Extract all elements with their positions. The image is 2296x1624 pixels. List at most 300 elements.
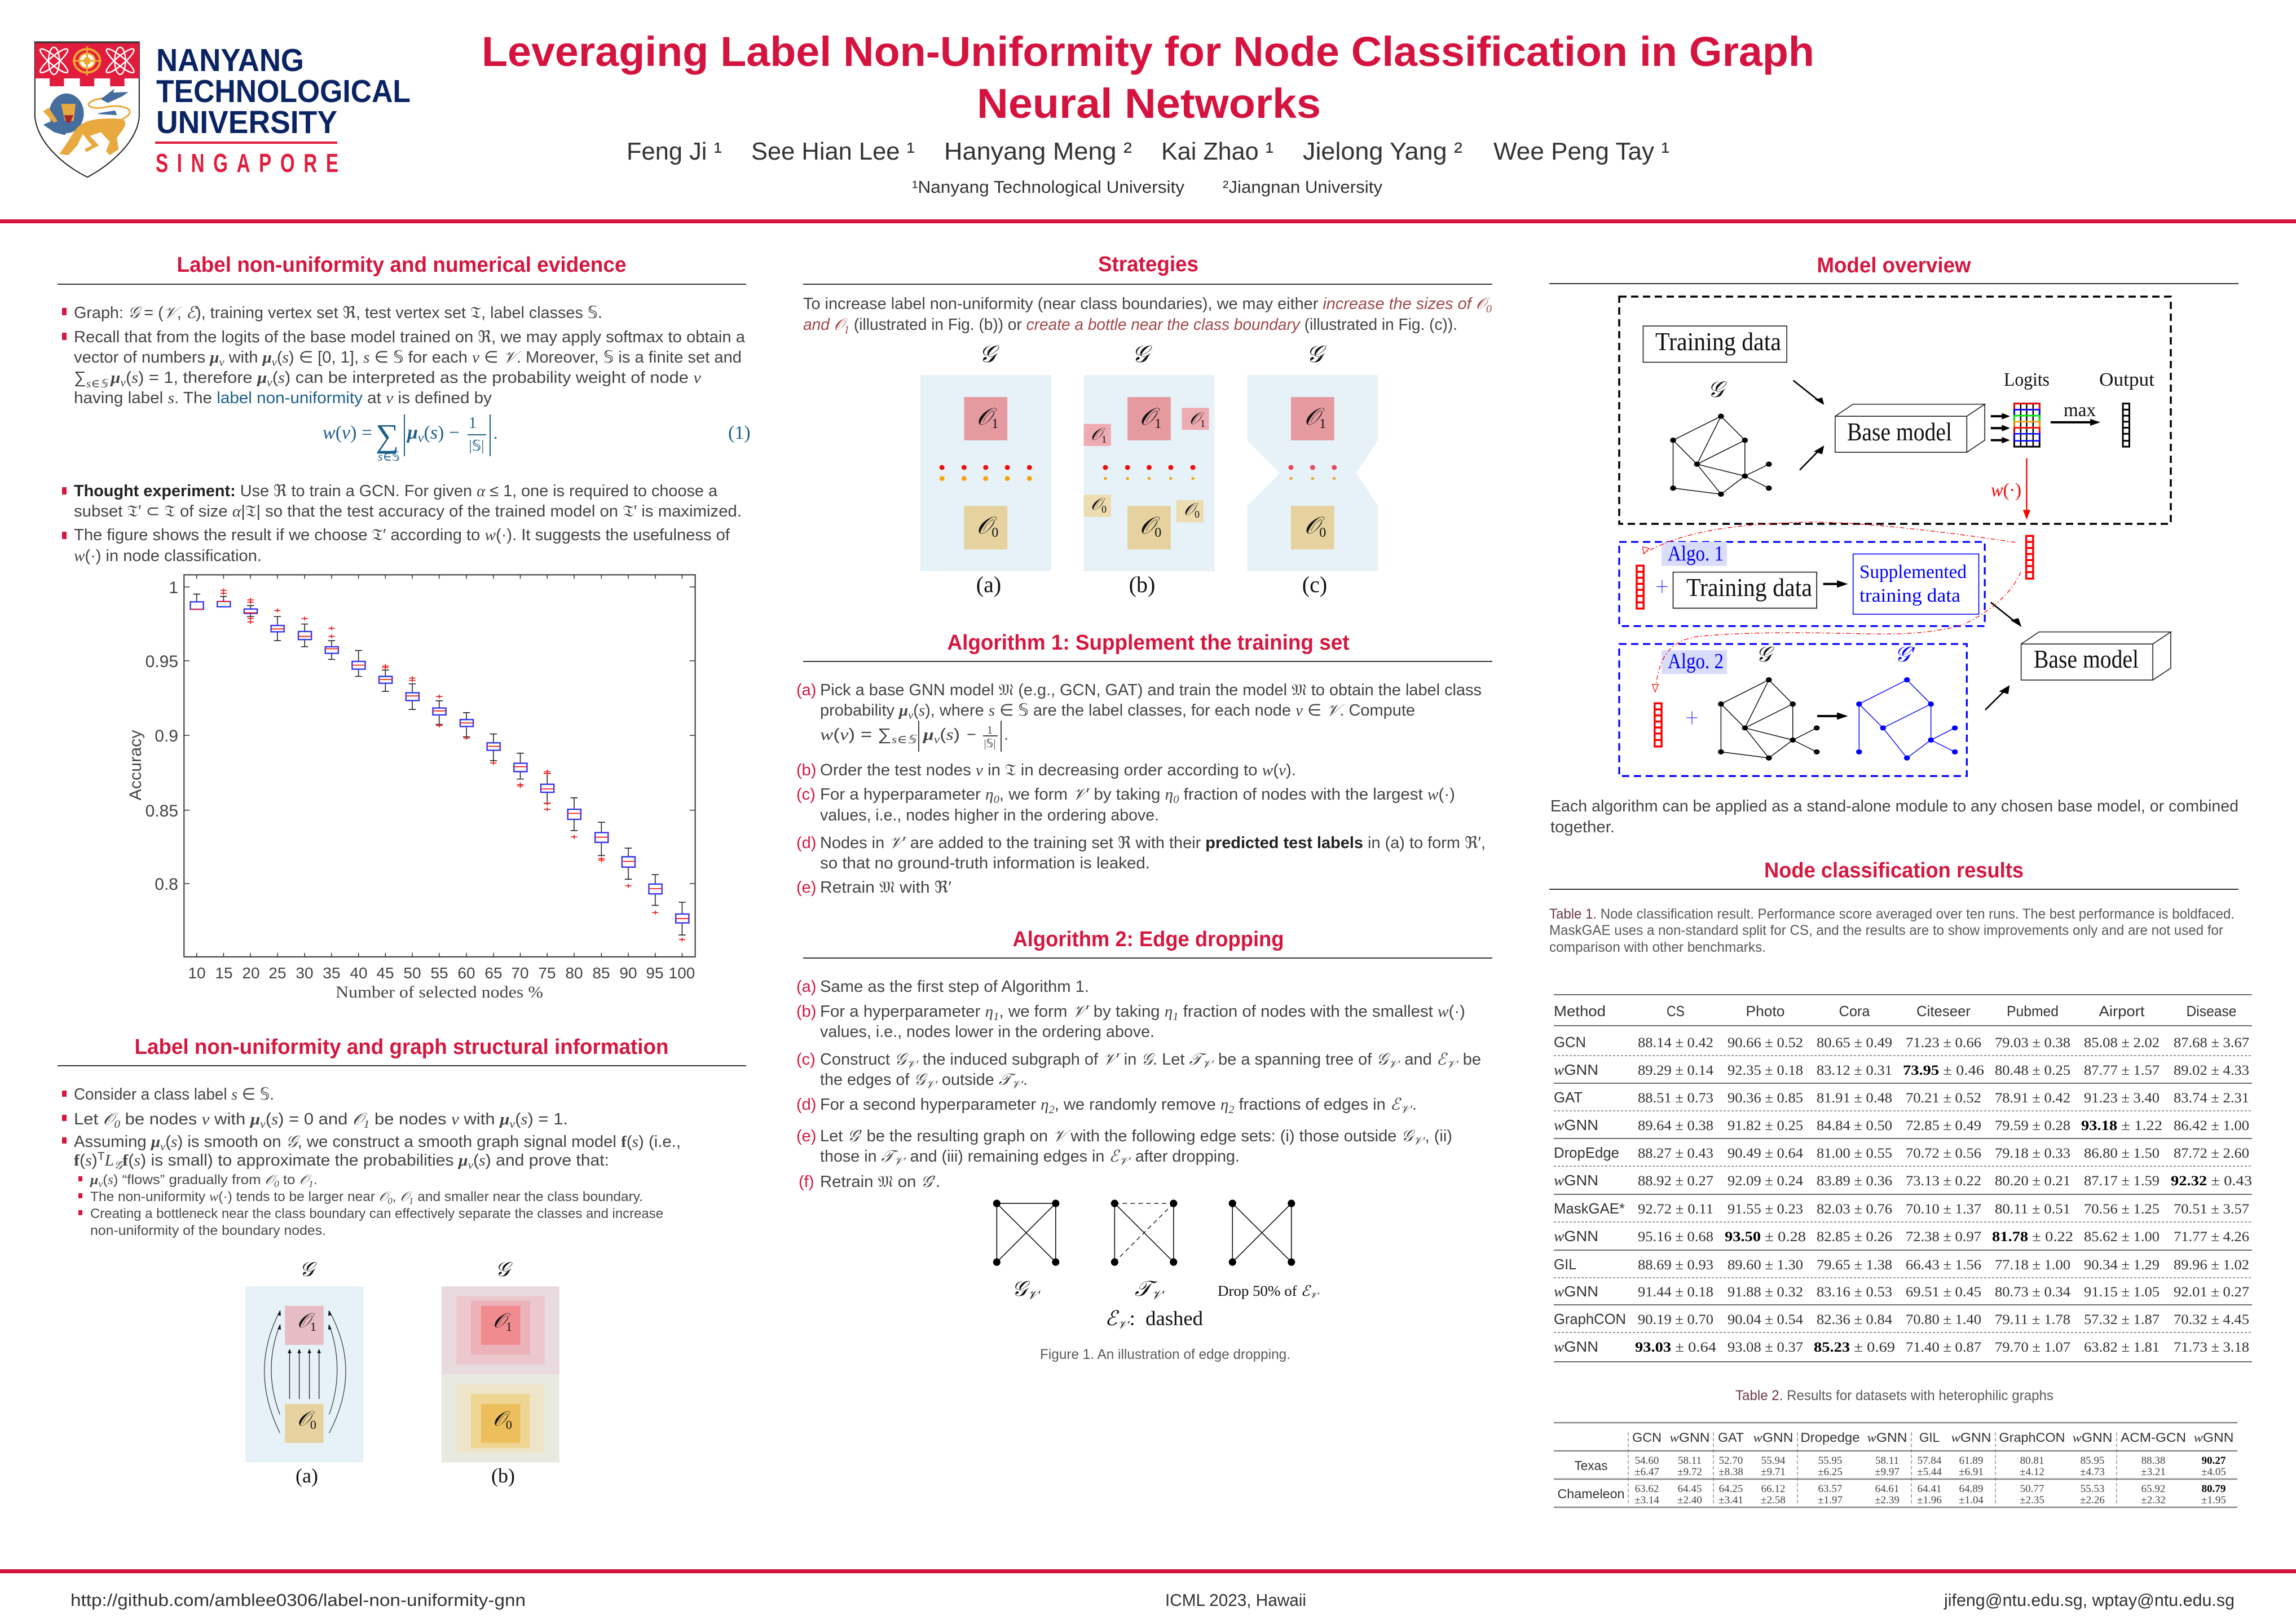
x axis labels: 25 — [268, 964, 287, 982]
text block: algorithm 2 steps: (f) — [799, 1173, 814, 1191]
table 2 header: wGNN — [1867, 1430, 1907, 1445]
text block: algorithm 2 steps: 1 — [993, 1010, 999, 1023]
table 1 values: 71.23 ± 0.66 — [1906, 1035, 1981, 1051]
text block: algorithm 1 steps: 0 — [994, 793, 999, 806]
text block: algorithm 2 steps: (e) — [796, 1127, 816, 1145]
table 1 row labels: GAT — [1554, 1089, 1583, 1106]
equation 1: non-uniformity: s∈𝕊 — [378, 449, 400, 464]
table 2 header: wGNN — [1753, 1430, 1793, 1445]
x axis labels: 95 — [646, 964, 664, 982]
table 1 values: 78.91 ± 0.42 — [1995, 1091, 2070, 1106]
table 1 values: 92.32 ± 0.43 — [2171, 1173, 2252, 1189]
text block: smooth graph signal: v — [260, 1118, 266, 1131]
text block: thought experiment: subset 𝔗′ ⊂ 𝔗 of size α|𝔗| so that the test accuracy of the trained model on 𝔗′ is maximized. — [74, 501, 742, 520]
heading: Model overview — [1817, 254, 1971, 277]
y axis labels: 0.85 — [146, 802, 178, 820]
table 2 header: GAT — [1718, 1430, 1744, 1445]
title: Leveraging Label Non-Uniformity for Node Classification in Graph — [482, 28, 1814, 75]
table 1 values: 90.34 ± 1.29 — [2084, 1257, 2160, 1273]
table 1 values: 80.11 ± 0.51 — [1995, 1202, 2070, 1217]
table 1 header: Cora — [1839, 1003, 1870, 1020]
x axis labels: 65 — [484, 964, 503, 982]
table 1 values: 83.74 ± 2.31 — [2174, 1091, 2249, 1106]
text block: smooth graph signal: s) = 0 and 𝒪 — [271, 1110, 363, 1128]
table 1 header: Citeseer — [1916, 1003, 1971, 1020]
equation 1: non-uniformity: . — [493, 424, 497, 443]
figure labels: 𝒪 — [1140, 404, 1154, 430]
table 2 header: wGNN — [2194, 1430, 2233, 1445]
table 1 values: 95.16 ± 0.68 — [1638, 1229, 1713, 1245]
table 1 values: 79.18 ± 0.33 — [1995, 1146, 2070, 1161]
text block: algorithm 2 steps: (c) — [796, 1051, 816, 1069]
text block: smooth graph signal: 1 — [364, 1118, 369, 1131]
table 1 values: 81.78 ± 0.22 — [1992, 1229, 2073, 1245]
table 2 header: wGNN — [2072, 1430, 2113, 1445]
text block: definitions: v — [267, 377, 272, 389]
figure labels: 𝒪 — [297, 1309, 310, 1332]
table 1 row labels: MaskGAE* — [1554, 1200, 1625, 1217]
wordmark: Nanyang Technological University Singapore: SINGAPORE — [156, 149, 338, 178]
figure labels: (b) — [491, 1464, 515, 1487]
table 1 values: 91.23 ± 3.40 — [2084, 1091, 2160, 1106]
table 2 values: 64.45 — [1678, 1483, 1702, 1495]
table 2 header: Chameleon — [1558, 1486, 1624, 1501]
text block: algorithm 2 steps: and (iii) remaining edges in — [906, 1148, 1109, 1166]
table 2 header: Dropedge — [1800, 1430, 1860, 1445]
text block: definitions: vector of numbers μ — [74, 348, 219, 367]
text block: definitions: s) can be interpreted as the probability weight of node v — [278, 369, 700, 387]
equation 1: non-uniformity: μ — [406, 422, 418, 443]
icon: NTU shield crest — [35, 42, 139, 177]
panel: algorithm 1 — [796, 631, 1492, 897]
table 1 values — [1635, 1035, 2252, 1355]
table 1 values: 85.08 ± 2.02 — [2084, 1035, 2160, 1051]
table 1 values: 90.66 ± 0.52 — [1727, 1035, 1803, 1051]
footer: jifeng@ntu.edu.sg, wptay@ntu.edu.sg — [1944, 1590, 2235, 1610]
authors: See Hian Lee ¹ — [751, 138, 915, 165]
text block: sub bullets: 𝒪 — [400, 1190, 412, 1204]
diagram labels: w(·) — [1991, 480, 2021, 501]
text block: smooth graph signal: T — [98, 1150, 105, 1163]
text block: smooth graph signal: Consider a class label s ∈ 𝕊. — [74, 1084, 274, 1104]
text block: strategies intro: To increase label non-uniformity (near class boundaries), we may either increase the sizes of 𝒪 — [803, 295, 1486, 313]
text block: definitions: μ — [109, 369, 120, 387]
text block: sub bullets: Creating a bottleneck near the class boundary can effectively separate the classes and increase — [90, 1206, 663, 1221]
table 1 values: 93.18 ± 1.22 — [2081, 1118, 2162, 1133]
equation 1: non-uniformity: |𝕊| — [469, 438, 484, 454]
text block: sub bullets: 0 — [387, 1195, 393, 1206]
text block: algorithm 1 steps: w(v) = ∑ — [820, 726, 884, 744]
table 1 row labels: wGNN — [1554, 1116, 1598, 1133]
text block: algorithm 1 steps: (d) — [796, 834, 816, 852]
figure labels: 𝒱′ — [1310, 1291, 1320, 1300]
equation 1: non-uniformity: ( — [424, 422, 430, 443]
x axis labels: 90 — [619, 964, 637, 982]
table 2 values: 85.95 — [2081, 1455, 2104, 1467]
text block: algorithm 1 steps: − — [967, 726, 976, 744]
table 2 values: 50.77 — [2020, 1483, 2044, 1495]
text block: sub bullets: 1 — [309, 1179, 314, 1189]
table 1 values: 84.84 ± 0.50 — [1817, 1118, 1892, 1133]
table 1 header: Pubmed — [2007, 1003, 2059, 1020]
figure labels — [296, 1258, 515, 1487]
text block: algorithm 2 steps: 𝒱′ — [1400, 1104, 1413, 1116]
text block: smooth graph signal: v with μ — [451, 1110, 509, 1128]
figure labels: 𝒪 — [1091, 425, 1101, 444]
table 1 values: 79.11 ± 1.78 — [1995, 1312, 2070, 1327]
figure labels: (a) — [296, 1464, 318, 1487]
authors — [627, 138, 1669, 165]
table 2 values: ±1.97 — [1818, 1494, 1843, 1506]
heading: Strategies — [1098, 253, 1198, 276]
table 2 values: 55.94 — [1761, 1455, 1786, 1467]
figure labels: 𝒪 — [493, 1309, 506, 1332]
text block: algorithm 2 steps: after dropping. — [1131, 1148, 1240, 1166]
table 2 values: 80.79 — [2202, 1483, 2226, 1495]
text block: algorithm 1 steps: (a) — [796, 681, 816, 699]
text block: algorithm 2 steps: (b) — [796, 1003, 816, 1021]
table 1 header: Photo — [1746, 1003, 1784, 1020]
text block: sub bullets: 0 — [274, 1179, 280, 1189]
diagram labels: max — [2064, 400, 2096, 421]
caption: table 1 — [1549, 906, 2235, 955]
text block: definitions: with — [224, 348, 263, 367]
figure labels — [1012, 1277, 1320, 1331]
text block: definitions: s) ∈ [0, 1], s ∈ 𝕊 for each v ∈ 𝒱. Moreover, 𝕊 is a finite set and — [283, 347, 741, 367]
table 2 values: ±5.44 — [1917, 1466, 1942, 1478]
table 1 values: 71.73 ± 3.18 — [2174, 1340, 2249, 1355]
table 1 values: 87.68 ± 3.67 — [2174, 1035, 2249, 1051]
figure labels: 𝒪 — [1184, 500, 1195, 519]
panel: strategies — [803, 253, 1492, 597]
table 2 values: 88.38 — [2141, 1455, 2165, 1467]
text block: definitions: ( — [272, 369, 278, 387]
table 1 values: 90.36 ± 0.85 — [1727, 1091, 1803, 1106]
table 1 row labels: GIL — [1554, 1256, 1576, 1273]
caption: Figure 1. An illustration of edge dropping. — [1040, 1347, 1290, 1362]
text block: smooth graph signal: s) and prove that: — [479, 1151, 605, 1170]
authors: Kai Zhao ¹ — [1161, 138, 1273, 165]
text block: definitions: v — [272, 356, 277, 369]
table 1 values: 82.85 ± 0.26 — [1817, 1229, 1892, 1245]
figure labels: 𝒪 — [1305, 513, 1319, 539]
y axis labels: 0.8 — [155, 875, 178, 894]
table 2 values: 63.57 — [1818, 1483, 1842, 1495]
text block: algorithm 1 steps: v — [908, 709, 913, 722]
table 1 values: 93.03 ± 0.64 — [1635, 1340, 1717, 1355]
table 2 values: 55.53 — [2081, 1483, 2104, 1495]
table 1 values: 91.15 ± 1.05 — [2084, 1285, 2160, 1300]
figure labels: 0 — [506, 1418, 512, 1432]
module labels: 𝒢 — [1756, 643, 1774, 667]
table 1 values: 91.82 ± 0.25 — [1727, 1118, 1803, 1133]
text block: definitions: having label s. The label non-uniformity at v is defined by — [74, 389, 492, 407]
footer: http://github.com/amblee0306/label-non-uniformity-gnn — [70, 1590, 526, 1610]
x axis labels: 60 — [457, 964, 475, 982]
text block: algorithm 2 steps: 𝒱′ — [1413, 1135, 1426, 1148]
text block: definitions: Recall that from the logits of the base model trained on ℜ, we may apply softmax to obtain a — [74, 328, 746, 346]
table 1 header — [1554, 1003, 2237, 1020]
text block: algorithm 2 steps: the edges of 𝒢 — [820, 1071, 926, 1089]
x axis labels: 40 — [350, 964, 368, 982]
table 2 values: ±9.72 — [1677, 1466, 1702, 1478]
text block: definitions: ( — [277, 348, 283, 367]
table 1 values: 87.17 ± 1.59 — [2084, 1173, 2160, 1189]
text block: algorithm 1 steps: s∈𝕊 — [892, 734, 918, 746]
figure: edge dropping graphs — [993, 1199, 1320, 1362]
table 1 values: 89.02 ± 4.33 — [2174, 1063, 2249, 1078]
text block: algorithm 2 steps — [796, 978, 1481, 1191]
caption: table 1: comparison with other benchmarks. — [1549, 939, 1766, 955]
figure labels: (b) — [1129, 572, 1155, 597]
text block: algorithm 1 steps: v — [934, 734, 940, 746]
table 1 header: Airport — [2099, 1003, 2145, 1020]
figure labels: 1 — [991, 417, 998, 431]
equation 1: non-uniformity — [323, 414, 751, 464]
table 2 values: ±2.35 — [2020, 1494, 2044, 1506]
text block: smooth graph signal: f(s) — [74, 1151, 97, 1170]
diagram labels: Training data — [1655, 327, 1781, 356]
x axis labels: 100 — [669, 964, 695, 982]
table 1 values: 90.19 ± 0.70 — [1638, 1312, 1713, 1327]
table 1 values: 86.80 ± 1.50 — [2084, 1146, 2160, 1161]
figure labels: 1 — [1200, 418, 1205, 429]
module labels: Algo. 1 — [1668, 542, 1724, 566]
table 1 values: 86.42 ± 1.00 — [2174, 1118, 2249, 1133]
text block: smooth graph signal: be nodes — [369, 1110, 451, 1128]
wordmark: Nanyang Technological University Singapore — [155, 42, 411, 178]
table 1 values: 69.51 ± 0.45 — [1906, 1285, 1981, 1300]
figure labels: 𝒢 — [1132, 342, 1152, 368]
table 1 values: 92.72 ± 0.11 — [1638, 1202, 1713, 1217]
panel: model overview — [1549, 254, 2238, 836]
text block: strategies intro: 0 — [1486, 303, 1492, 315]
text block: definitions — [62, 303, 746, 539]
text block: algorithm 1 steps: 𝒱′ by taking η — [1072, 785, 1173, 804]
table 1 values: 91.55 ± 0.23 — [1727, 1202, 1803, 1217]
text block: algorithm 1 steps: s), where s ∈ 𝕊 are the label classes, for each node v ∈ 𝒱. Compute — [919, 700, 1415, 720]
text block: thought experiment: Thought experiment: Use ℜ to train a GCN. For given α ≤ 1, one is required to choose a — [74, 482, 718, 500]
table 2 values: 55.95 — [1818, 1455, 1842, 1467]
table 2 values: 57.84 — [1918, 1455, 1942, 1467]
table 1 header: Disease — [2186, 1003, 2237, 1020]
text block: algorithm 2 steps: ℰ — [1390, 1096, 1402, 1114]
text block: algorithm 2 steps: η — [1220, 1096, 1228, 1114]
text block: algorithm 2 steps: Construct 𝒢 — [820, 1051, 906, 1069]
text block: smooth graph signal: f — [122, 1151, 129, 1170]
table 1 values: 85.23 ± 0.69 — [1814, 1340, 1895, 1355]
figure labels: 1 — [506, 1320, 512, 1334]
text block: algorithm 2 steps: 𝒱′ — [1202, 1058, 1215, 1071]
heading: Algorithm 1: Supplement the training set — [948, 631, 1350, 655]
x axis labels: 35 — [323, 964, 341, 982]
table 1 row labels: wGNN — [1554, 1061, 1598, 1078]
table 2 values: ±2.58 — [1761, 1494, 1786, 1506]
table 2 values: ±9.97 — [1875, 1466, 1900, 1478]
table 2 values: ±3.14 — [1634, 1494, 1659, 1506]
figure labels: 0 — [1154, 526, 1161, 540]
text block: algorithm 2 steps: 𝒯 — [999, 1071, 1016, 1089]
table 1 values: 90.04 ± 0.54 — [1727, 1312, 1804, 1327]
table 2 values: 64.89 — [1959, 1483, 1983, 1495]
table 1 values: 87.77 ± 1.57 — [2084, 1063, 2160, 1078]
text block: algorithm 2 steps: (d) — [796, 1096, 816, 1114]
text block: algorithm 1 steps — [796, 680, 1486, 897]
table 1 values: 70.72 ± 0.56 — [1906, 1146, 1981, 1161]
table 1 values: 81.91 ± 0.48 — [1817, 1091, 1892, 1106]
diagram: algorithm modules — [1619, 522, 2171, 776]
table 1 values: 73.95 ± 0.46 — [1903, 1063, 1984, 1078]
text block: algorithm 1 steps: s) — [946, 726, 959, 744]
text block: algorithm 2 steps: 𝒢 — [1376, 1051, 1390, 1069]
table 1 row labels: DropEdge — [1554, 1144, 1619, 1161]
table 1 values: 70.51 ± 3.57 — [2174, 1202, 2249, 1217]
table 2 values: 65.92 — [2141, 1483, 2165, 1495]
figure labels: 𝒪 — [1305, 404, 1319, 430]
text block: smooth graph signal: ( — [515, 1110, 521, 1128]
text block: sub bullets: and smaller near the class boundary. — [413, 1189, 643, 1204]
text block: algorithm 2 steps: w(·) — [1438, 1003, 1465, 1021]
figure labels: : dashed — [1130, 1307, 1203, 1330]
table 2 values: 64.25 — [1719, 1483, 1743, 1495]
diagram labels: Output — [2099, 369, 2155, 390]
figure labels: 1 — [1101, 434, 1107, 445]
table 2 values: ±9.71 — [1761, 1466, 1786, 1478]
table 2 values: 58.11 — [1678, 1455, 1702, 1467]
caption: table 1: Table 1. Node classification result. Performance score averaged over ten runs. The best performance is boldfaced. — [1549, 906, 2235, 922]
text block: algorithm 1 steps: values, i.e., nodes higher in the ordering above. — [820, 806, 1159, 824]
module labels: Algo. 2 — [1668, 650, 1724, 673]
figure labels: 1 — [310, 1320, 316, 1334]
table 1 row labels: wGNN — [1554, 1228, 1598, 1245]
text block: algorithm 1 steps: (e) — [796, 879, 816, 897]
authors: Hanyang Meng ² — [944, 138, 1132, 165]
figure labels: 𝒱′ — [1151, 1288, 1165, 1302]
figure labels: 0 — [1101, 504, 1107, 515]
table 2 values: ±2.39 — [1875, 1494, 1900, 1506]
table 1 values: 70.10 ± 1.37 — [1906, 1202, 1981, 1217]
text block: smooth graph signal: v — [468, 1159, 473, 1172]
x axis labels: 30 — [296, 964, 314, 982]
diagram labels: Logits — [2004, 369, 2050, 390]
table 2 values: ±2.40 — [1677, 1494, 1702, 1506]
text block: sub bullets: s) “flows” gradually from 𝒪 — [108, 1172, 274, 1188]
figure labels: 𝒪 — [1189, 409, 1200, 428]
table 2 header: GraphCON — [1999, 1430, 2065, 1445]
text block: definitions: μ — [262, 348, 272, 367]
table 2 values: 54.60 — [1635, 1455, 1659, 1467]
table 1 values: 63.82 ± 1.81 — [2084, 1340, 2160, 1355]
text block: sub bullets: ( — [103, 1172, 108, 1188]
figure labels: 𝒪 — [493, 1407, 506, 1430]
table 2 values — [1634, 1455, 2226, 1506]
text block: algorithm 2 steps: 2 — [1049, 1104, 1055, 1116]
text block: algorithm 1 steps: μ — [922, 726, 934, 744]
equation 1: non-uniformity: 1 — [469, 414, 477, 432]
text block: smooth graph signal: Let 𝒪 — [74, 1110, 113, 1128]
equation 1: non-uniformity: s) − — [430, 422, 460, 443]
table 1 values: 57.32 ± 1.87 — [2084, 1312, 2160, 1327]
text block: smooth graph signal: v with μ — [202, 1110, 259, 1128]
footer: ICML 2023, Hawaii — [1165, 1590, 1306, 1610]
table 2 values: ±3.21 — [2141, 1466, 2166, 1478]
table 1 values: 79.65 ± 1.38 — [1817, 1257, 1892, 1273]
text block: algorithm 2 steps: 𝒱′ — [906, 1058, 919, 1071]
table 1 values: 77.18 ± 1.00 — [1995, 1257, 2070, 1273]
text block: algorithm 2 steps: be — [1458, 1051, 1481, 1069]
authors: Wee Peng Tay ¹ — [1493, 138, 1669, 165]
table 1 values: 80.48 ± 0.25 — [1995, 1063, 2070, 1078]
figure labels: 𝒢 — [495, 1258, 513, 1281]
text block: algorithm 1 steps: For a hyperparameter η — [820, 785, 993, 804]
table 2 values: 61.89 — [1959, 1455, 1983, 1467]
title: Neural Networks — [977, 80, 1321, 127]
table 1 values: 91.88 ± 0.32 — [1727, 1285, 1803, 1300]
authors: Feng Ji ¹ — [627, 138, 722, 165]
text block: algorithm 1 steps: ( — [913, 701, 919, 720]
figure: three strategy diagrams — [920, 342, 1378, 597]
table 1 values: 72.38 ± 0.97 — [1906, 1229, 1981, 1245]
caption: table 1: MaskGAE uses a non-standard split for CS, and the results are to show improvements only and are not used for — [1549, 923, 2223, 938]
text block: definitions: s∈𝕊 — [86, 378, 111, 390]
table 2 values: ±6.47 — [1634, 1466, 1659, 1478]
text block: algorithm 1 steps: (b) — [796, 761, 816, 779]
panel: label non-uniformity and numerical evidence — [58, 253, 751, 1001]
text block: sub bullets: The non-uniformity w(·) tends to be larger near 𝒪 — [90, 1189, 387, 1204]
module labels: training data — [1859, 585, 1960, 606]
figure labels: 𝒢 — [979, 342, 999, 368]
table 1 values: 91.44 ± 0.18 — [1638, 1285, 1713, 1300]
table 2 header — [1558, 1430, 2233, 1501]
text block: smooth graph signal: be nodes — [120, 1110, 202, 1128]
equation 1: non-uniformity: ∑ — [376, 417, 399, 454]
x axis labels: 75 — [538, 964, 556, 982]
figure labels: 𝒪 — [297, 1407, 310, 1430]
diagram labels: 𝒢 — [1708, 377, 1727, 402]
text block: smooth graph signal: v — [509, 1118, 515, 1131]
affiliations — [912, 177, 1382, 197]
text block: algorithm 2 steps: 1 — [1173, 1010, 1179, 1023]
text block: module note: Each algorithm can be applied as a stand-alone module to any chosen base model, or combined — [1550, 797, 2238, 815]
text block: strategies intro — [803, 295, 1492, 336]
table 2 header: GIL — [1919, 1430, 1940, 1445]
affiliations: ¹Nanyang Technological University — [912, 177, 1184, 197]
table 1 values: 83.89 ± 0.36 — [1817, 1173, 1892, 1189]
table 1 values: 80.20 ± 0.21 — [1995, 1173, 2070, 1189]
table 1 values: 83.16 ± 0.53 — [1817, 1285, 1892, 1300]
text block: definitions: s) = 1, therefore μ — [131, 369, 266, 387]
text block: algorithm 2 steps: Same as the first step of Algorithm 1. — [820, 978, 1089, 996]
table 1 values: 82.36 ± 0.84 — [1817, 1312, 1893, 1327]
text block: algorithm 1 steps: , we form — [999, 785, 1072, 804]
y axis labels: 0.9 — [155, 727, 178, 745]
y axis labels — [126, 579, 178, 894]
figure labels: 0 — [1195, 509, 1200, 520]
table 1 values: 85.62 ± 1.00 — [2084, 1229, 2160, 1245]
panel: node classification results — [1549, 859, 2252, 1507]
y axis labels: 0.95 — [146, 652, 178, 671]
text block: sub bullets: non-uniformity of the boundary nodes. — [90, 1223, 326, 1238]
figure labels: (c) — [1302, 572, 1327, 597]
table 1 values: 79.03 ± 0.38 — [1995, 1035, 2070, 1051]
text block: algorithm 2 steps: 𝒱′ — [1388, 1058, 1401, 1071]
text block: smooth graph signal: (s) is small) to approximate the probabilities μ — [128, 1151, 468, 1170]
text block: strategies intro: 1 — [844, 324, 849, 336]
wordmark: Nanyang Technological University Singapore: NANYANG — [156, 42, 304, 78]
table 1 header: CS — [1667, 1003, 1685, 1020]
table 1 values: 70.80 ± 1.40 — [1906, 1312, 1981, 1327]
text block: definitions: ∑ — [74, 369, 86, 387]
